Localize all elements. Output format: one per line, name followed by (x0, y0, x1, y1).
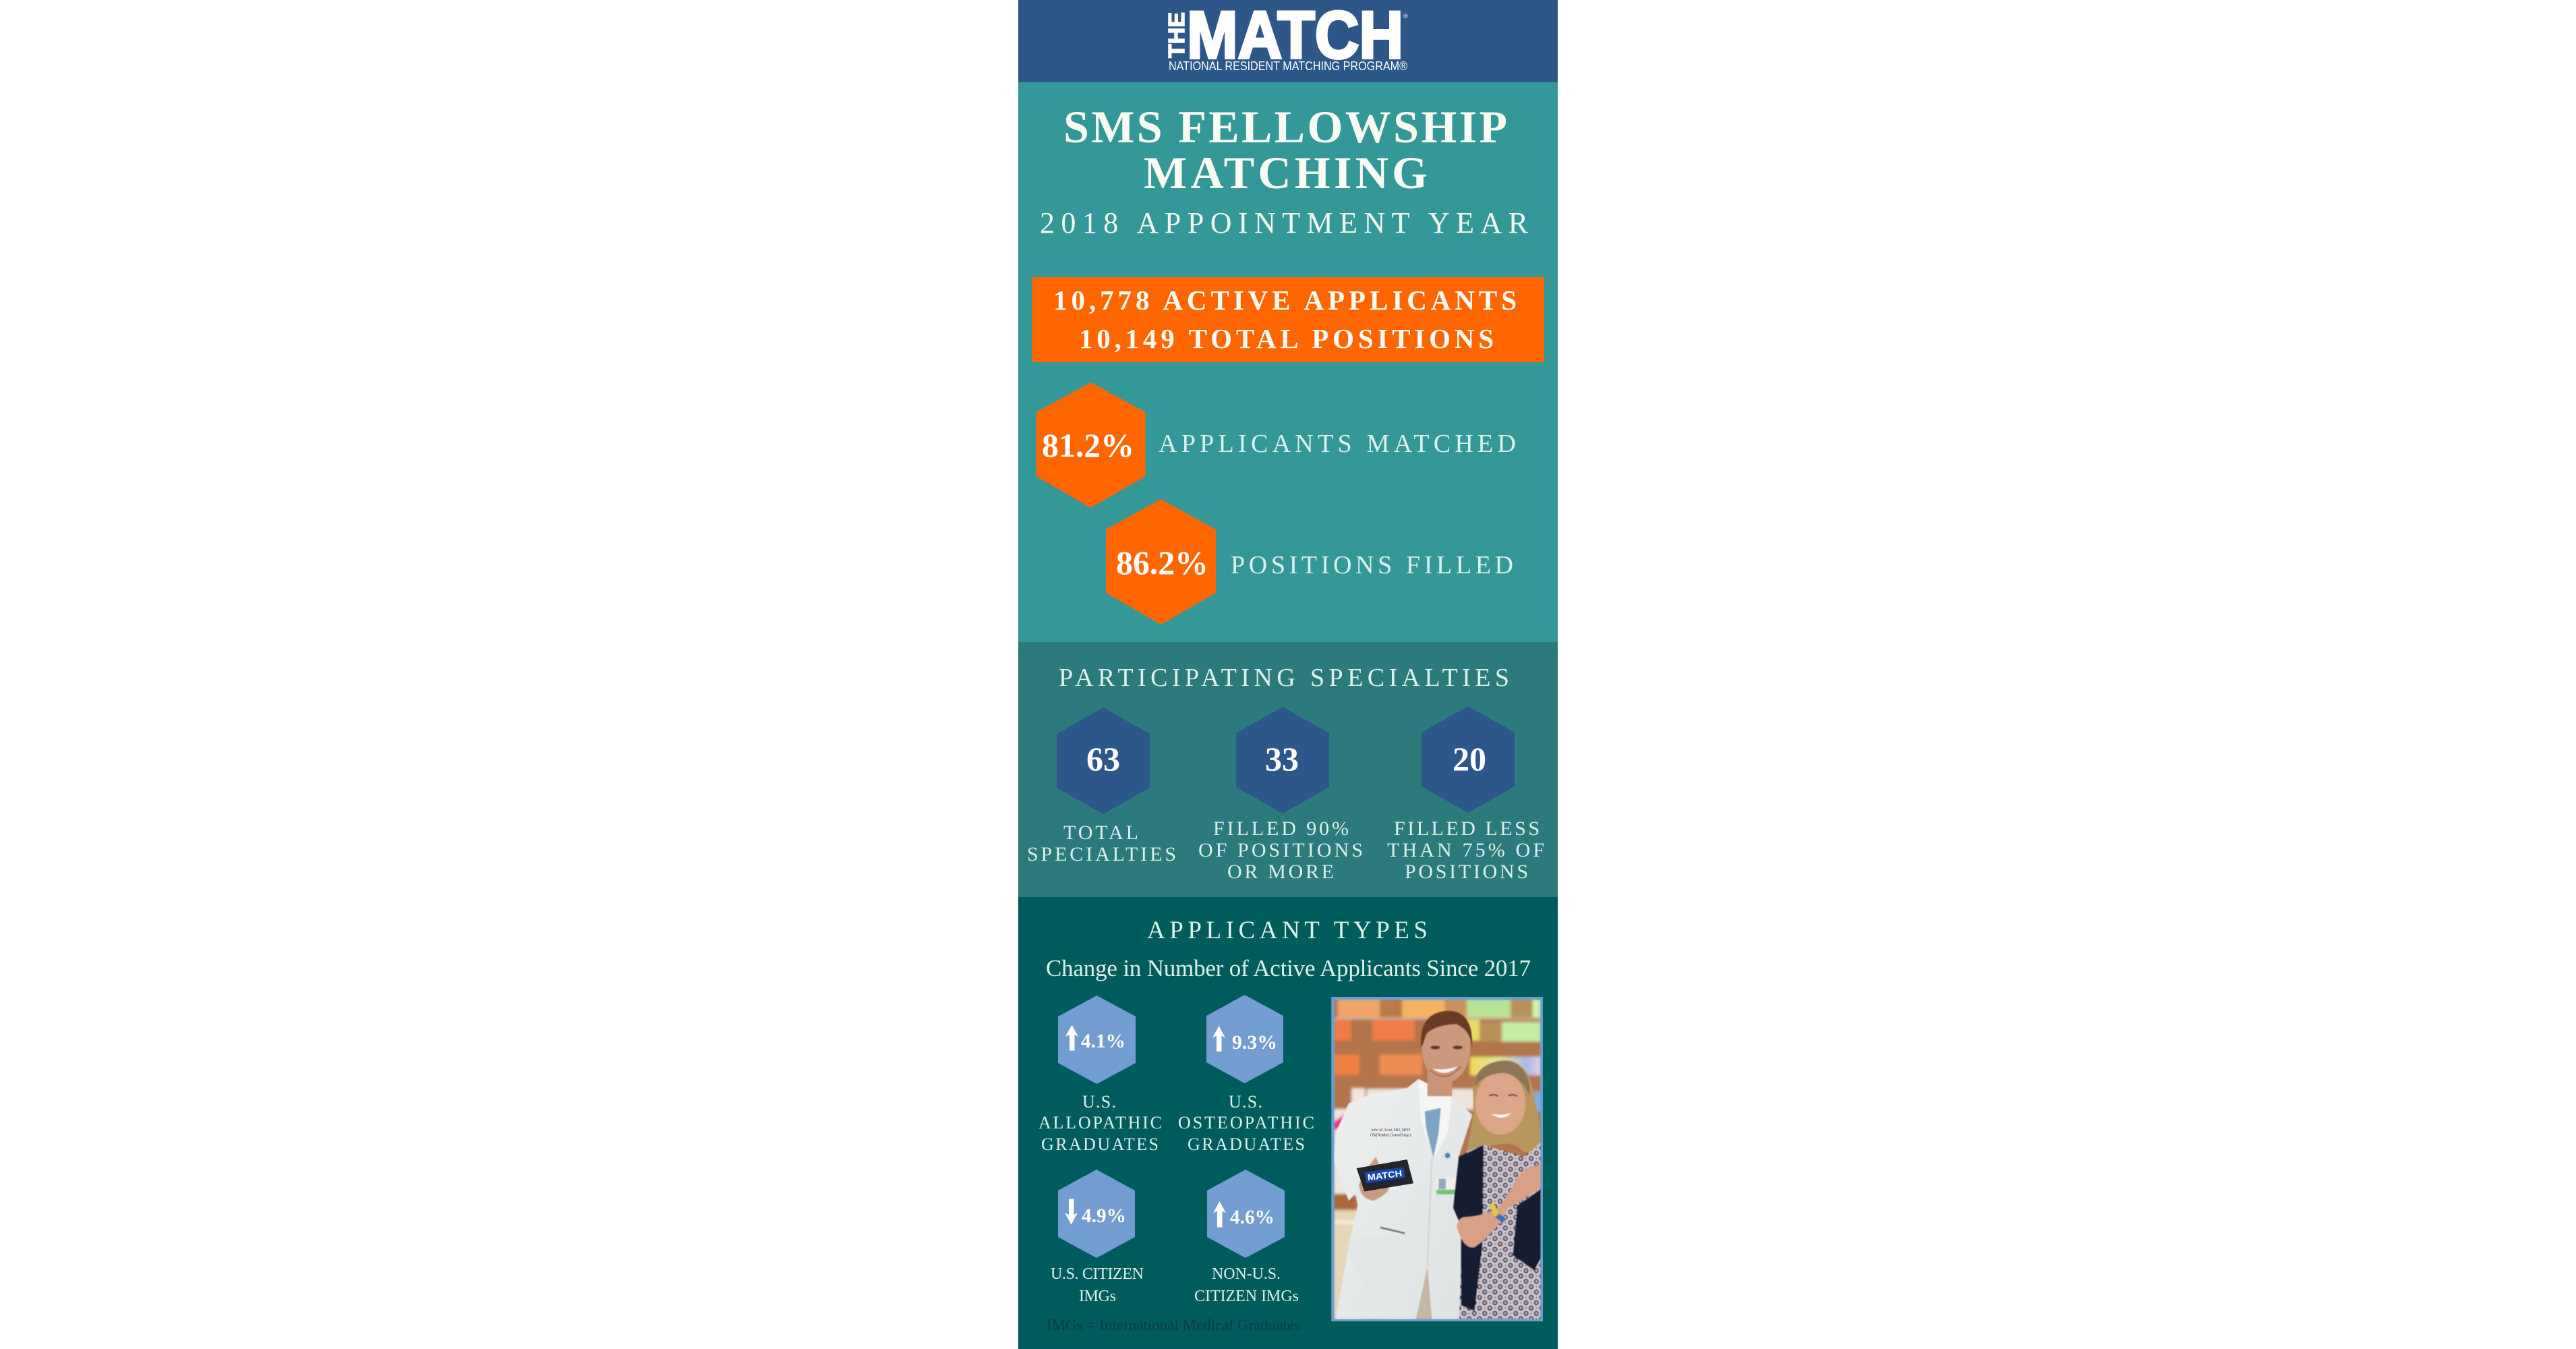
stat: applicants matched (1036, 382, 1516, 508)
callout: applicants and positions totals: 10,149 TOTAL POSITIONS (1079, 323, 1494, 354)
title: MATCHING (1144, 147, 1428, 198)
stat: 33 filled 90 percent or more: OR MORE (1227, 861, 1334, 883)
header: The Match logo band (1018, 0, 1558, 82)
stat: U.S. osteopathic graduates up 9.3%: OSTEOPATHIC (1178, 1113, 1314, 1132)
stat: 33 filled 90 percent or more: 33 (1265, 740, 1299, 778)
stat: non-U.S. citizen IMGs up 4.6%: CITIZEN IMGs (1194, 1288, 1299, 1305)
phone with Match logo (1357, 1159, 1413, 1191)
logo: THE MATCH National Resident Matching Program: ® (1403, 13, 1408, 20)
stat: U.S. citizen IMGs down 4.9%: IMGs (1079, 1288, 1116, 1305)
photo background: stained glass and wood wall (1334, 1000, 1541, 1319)
stat: U.S. osteopathic graduates up 9.3%: 9.3% (1232, 1031, 1277, 1054)
stat: positions filled: POSITIONS FILLED (1231, 551, 1513, 579)
stat: U.S. citizen IMGs down 4.9% (1051, 1170, 1144, 1305)
stat: U.S. allopathic graduates up 4.1%: U.S. (1082, 1092, 1116, 1112)
stat: U.S. osteopathic graduates up 9.3%: GRADUATES (1188, 1135, 1305, 1154)
stat: U.S. osteopathic graduates up 9.3%: U.S. (1229, 1092, 1262, 1112)
stat: non-U.S. citizen IMGs up 4.6%: NON-U.S. (1212, 1265, 1281, 1283)
stat: 33 filled 90 percent or more: FILLED 90% (1213, 817, 1349, 840)
logo: THE MATCH National Resident Matching Program: NATIONAL RESIDENT MATCHING PROGRAM® (1169, 59, 1407, 73)
stat: 63 total specialties: 63 (1086, 740, 1120, 778)
stat: non-U.S. citizen IMGs up 4.6%: 4.6% (1230, 1206, 1275, 1228)
stat: applicants matched: 81.2% (1042, 426, 1134, 464)
stat: U.S. citizen IMGs down 4.9%: 4.9% (1082, 1205, 1126, 1227)
panel: headline and key results (1018, 82, 1558, 642)
panel: participating specialties (1018, 642, 1558, 897)
stat: positions filled: 86.2% (1116, 544, 1208, 581)
coat embroidery: Chief Resident, General Surgery (1370, 1132, 1412, 1138)
stat: 20 filled less than 75 percent: 20 (1453, 740, 1486, 778)
stat: U.S. citizen IMGs down 4.9%: U.S. CITIZEN (1051, 1265, 1144, 1283)
stat: 63 total specialties: TOTAL (1063, 822, 1138, 844)
subheading: change since 2017: Change in Number of Active Applicants Since 2017 (1046, 955, 1531, 981)
man in white coat (1335, 1011, 1472, 1319)
coat embroidery (1370, 1128, 1412, 1138)
stat: U.S. allopathic graduates up 4.1%: GRADUATES (1041, 1135, 1159, 1154)
callout: applicants and positions totals (1032, 277, 1544, 362)
stat: 20 filled less than 75 percent: THAN 75% OF (1387, 839, 1544, 861)
stat: 20 filled less than 75 percent: FILLED LESS (1394, 817, 1540, 840)
stat: 33 filled 90 percent or more (1198, 707, 1363, 883)
phone with Match logo: MATCH (1367, 1168, 1403, 1182)
stat: U.S. allopathic graduates up 4.1%: ALLOPATHIC (1038, 1113, 1162, 1132)
coat embroidery: John M. Scott, MD, MPH (1371, 1128, 1411, 1132)
stat: U.S. allopathic graduates up 4.1% (1038, 996, 1162, 1154)
stat: U.S. allopathic graduates up 4.1%: 4.1% (1081, 1030, 1125, 1052)
title: SMS FELLOWSHIP (1063, 101, 1507, 152)
callout: applicants and positions totals: 10,778 ACTIVE APPLICANTS (1053, 285, 1517, 316)
logo: THE MATCH National Resident Matching Program: THE (1164, 12, 1189, 58)
stat: 20 filled less than 75 percent: POSITIONS (1405, 861, 1528, 883)
heading: participating specialties: PARTICIPATING SPECIALTIES (1059, 664, 1509, 692)
heading: applicant types: APPLICANT TYPES (1147, 917, 1428, 944)
title (1063, 101, 1507, 198)
panel: applicant types (1018, 897, 1558, 1349)
woman in floral dress (1453, 1060, 1541, 1319)
stat: 20 filled less than 75 percent (1387, 706, 1544, 883)
stat: applicants matched: APPLICANTS MATCHED (1159, 430, 1516, 458)
subtitle: appointment year: 2018 APPOINTMENT YEAR (1040, 206, 1529, 239)
photo: two physicians holding phone with Match logo (1331, 997, 1543, 1321)
stat: 63 total specialties (1027, 708, 1176, 865)
stat: U.S. osteopathic graduates up 9.3% (1178, 995, 1314, 1154)
stat: 63 total specialties: SPECIALTIES (1027, 843, 1176, 865)
stat: 33 filled 90 percent or more: OF POSITIONS (1198, 839, 1363, 861)
footnote: IMGs definition: IMGs = International Medical Graduates (1047, 1317, 1300, 1333)
stat: non-U.S. citizen IMGs up 4.6% (1194, 1170, 1299, 1305)
stat: positions filled (1106, 499, 1513, 625)
